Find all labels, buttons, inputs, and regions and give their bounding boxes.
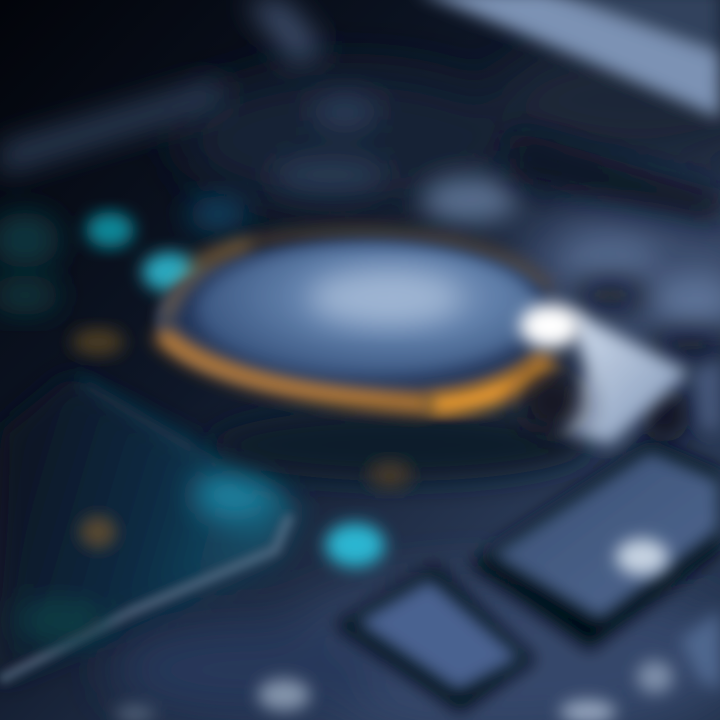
key: right middle [695,360,720,430]
lens dome [196,242,540,378]
dark lens foot [520,370,584,434]
white key glints [115,539,673,720]
dark key gaps [510,130,720,443]
orange highlight [430,358,550,405]
lens highlight [310,274,460,322]
lens with orange ring [155,232,555,405]
lens rim back [190,232,550,290]
key: bottom right [680,610,720,690]
cyan indicator light [325,523,385,567]
background key shapes [270,94,720,328]
shadow under lens [210,409,590,481]
key shadow lower [335,565,535,712]
keyboard keys [335,360,720,712]
key: lower middle [355,578,522,692]
top right light bar [415,0,720,118]
white glare and light plate [520,304,690,445]
cyan and teal glow spots [0,196,248,356]
key shadow right [470,440,720,650]
key: large right [490,450,720,620]
orange ring upper left [165,245,250,320]
panel: phone at lower left [0,375,300,680]
lens base [155,242,555,398]
orange ring [160,332,430,404]
upper left streaks [0,0,325,175]
small amber spot [368,461,412,489]
